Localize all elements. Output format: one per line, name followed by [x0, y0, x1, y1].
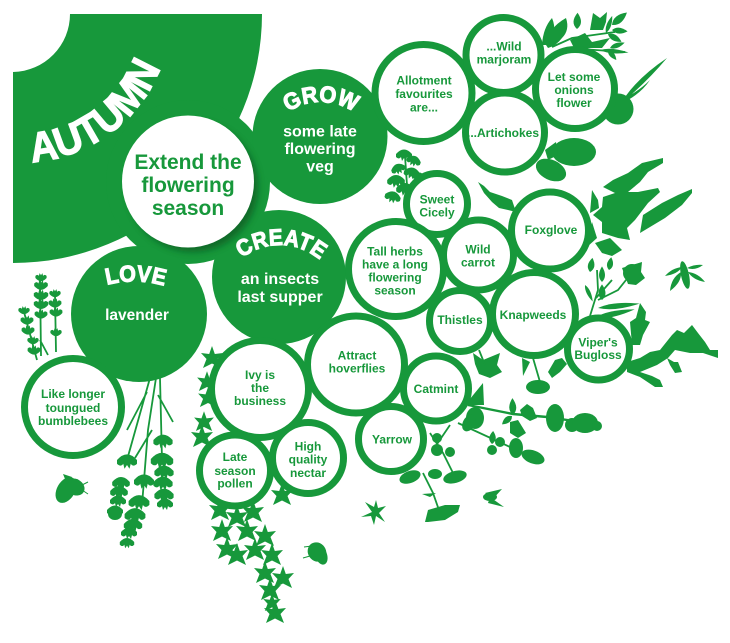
circle: wild carrot: [444, 220, 514, 290]
plant: knapweed heads: [522, 358, 567, 394]
label: Wild: [465, 242, 491, 256]
plant: ivy: [191, 346, 294, 623]
circle: thistles: [430, 290, 490, 352]
label: season: [374, 284, 416, 298]
text: an insects last supper: an insects: [241, 271, 319, 288]
insect: fly: [483, 489, 504, 507]
label: bumblebees: [38, 414, 108, 428]
plant: sweet cicely: [383, 150, 426, 205]
label: have a long: [362, 258, 428, 272]
circle: viper's bugloss: [568, 318, 630, 380]
label: ...Artichokes: [467, 126, 539, 140]
plant: viper's bugloss: [627, 303, 718, 387]
circle: sweet cicely: [406, 174, 468, 234]
label: flower: [556, 96, 592, 110]
label: toungued: [46, 401, 100, 415]
label: High: [295, 440, 321, 454]
circle: attract hoverflies: [308, 316, 404, 413]
label: are...: [410, 100, 438, 114]
circle: knapweeds: [492, 272, 576, 356]
panel: create circle: [212, 210, 346, 344]
heading: LOVE: LOVE: [104, 264, 168, 286]
label: Sweet: [420, 192, 454, 206]
text: an insects last supper: last supper: [237, 289, 323, 306]
panel: grow circle: [252, 69, 388, 204]
plant: thistle head: [473, 350, 502, 378]
plant: artichokes: [532, 138, 596, 186]
circle: yarrow: [358, 406, 424, 472]
label: onions: [554, 83, 594, 97]
label: Ivy is: [245, 368, 275, 382]
label: Attract: [338, 348, 376, 362]
text: lavender: lavender: [105, 307, 169, 324]
label: favourites: [395, 87, 453, 101]
label: quality: [289, 452, 328, 466]
text: some late flowering veg: flowering: [284, 141, 356, 158]
label: Catmint: [414, 382, 458, 396]
text: some late flowering veg: some late: [283, 124, 357, 140]
circle: wild marjoram: [466, 18, 541, 92]
label: Late: [223, 450, 248, 464]
label: Foxglove: [525, 223, 578, 237]
plant: foxglove left spike: [478, 182, 516, 212]
label: pollen: [217, 476, 253, 490]
panel: extend the flowering season: [122, 116, 258, 252]
circle: onions: [536, 50, 614, 128]
plant: yarrow: [398, 412, 546, 522]
heading: CREATE: CREATE: [236, 228, 329, 260]
label: Tall herbs: [367, 244, 423, 258]
plant: lavender upright: [18, 273, 62, 360]
label: Thistles: [437, 313, 483, 327]
insect: right bumblebee: [303, 539, 330, 566]
label: season: [214, 464, 256, 478]
label: ...Wild: [486, 40, 522, 54]
text: extend the flowering season: season: [152, 197, 224, 220]
text: extend the flowering season: flowering: [141, 174, 235, 197]
plant: catmint: [465, 383, 602, 438]
circle: catmint: [404, 356, 468, 421]
label: Cicely: [419, 206, 455, 220]
label: Viper's: [578, 336, 618, 350]
plant: thistle and knapweed: [583, 257, 645, 321]
panel: love circle: [71, 246, 207, 382]
label: Knapweeds: [500, 308, 567, 322]
circle: foxglove: [512, 192, 588, 269]
heading: AUTUMN: AUTUMN: [32, 56, 161, 164]
plant: foxglove right cluster: [587, 158, 692, 256]
label: Yarrow: [372, 432, 413, 446]
circle: artichokes: [466, 93, 544, 172]
insect: left bumblebee: [51, 473, 88, 507]
insect: moth: [665, 260, 705, 291]
plant: hanging lavender: [107, 378, 174, 548]
plant: marjoram: [542, 10, 629, 62]
label: nectar: [290, 466, 326, 480]
label: Allotment: [396, 74, 452, 88]
label: hoverflies: [329, 362, 386, 376]
icon: palm leaf: [361, 500, 386, 525]
circle: ivy is the business: [212, 340, 308, 438]
circle: like longer toungued bumblebees: [24, 358, 122, 456]
label: carrot: [461, 256, 495, 270]
circle: allotment favourites: [375, 44, 472, 142]
label: Like longer: [41, 387, 105, 401]
label: Bugloss: [574, 348, 622, 362]
panel: autumn quarter disc: [13, 14, 270, 264]
label: the: [251, 381, 269, 395]
label: flowering: [368, 270, 422, 284]
circle: high quality nectar: [272, 422, 344, 494]
circle: late season pollen: [200, 435, 270, 506]
text: some late flowering veg: veg: [306, 158, 334, 176]
circle: tall herbs: [348, 222, 444, 316]
label: business: [234, 394, 286, 408]
text: extend the flowering season: Extend the: [134, 151, 242, 174]
plant: onion: [602, 58, 667, 124]
heading: GROW: GROW: [283, 86, 362, 110]
label: marjoram: [477, 52, 531, 66]
label: Let some: [548, 70, 601, 84]
